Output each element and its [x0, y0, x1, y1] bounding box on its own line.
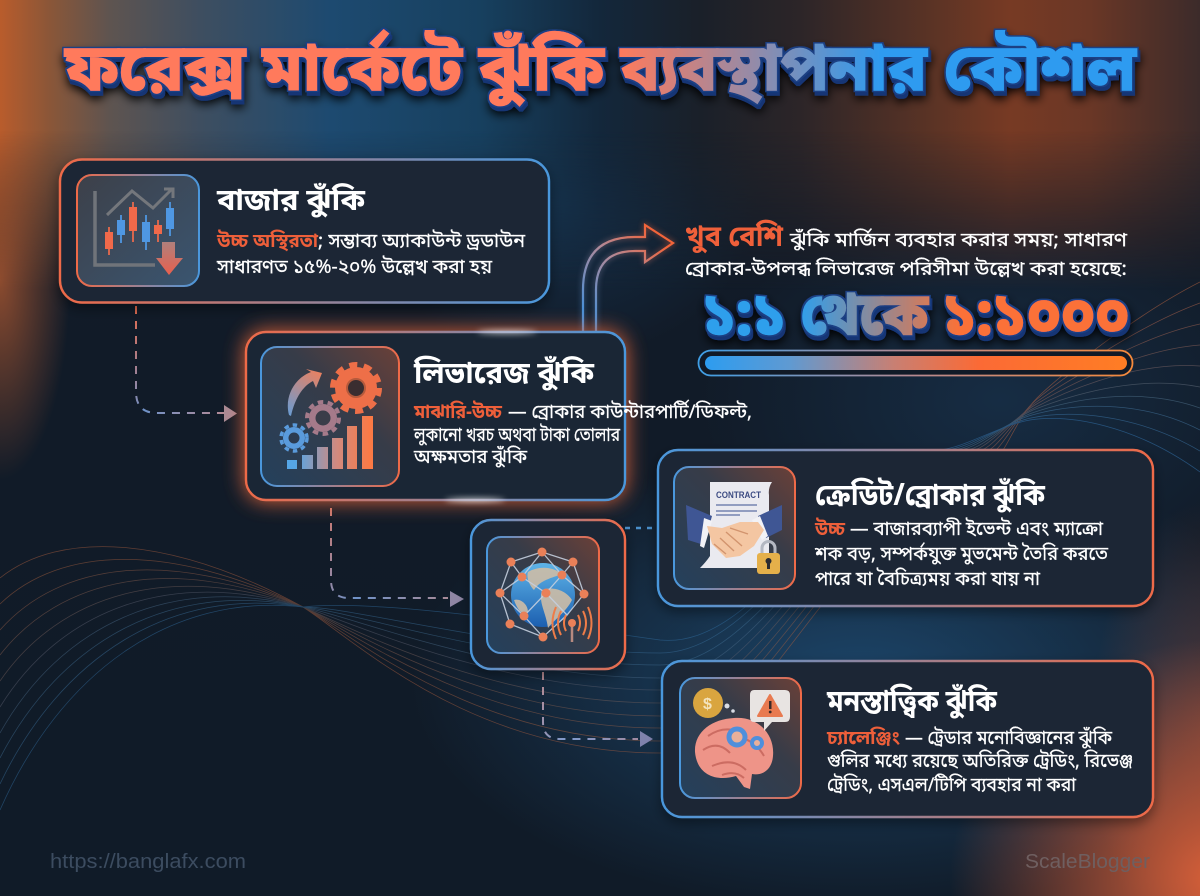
text block: গুলির মধ্যে রয়েছে অতিরিক্ত ট্রেডিং, রিভেঞ্জ	[827, 749, 1133, 775]
title: ফরেক্স মার্কেটে ঝুঁকি ব্যবস্থাপনার কৌশল	[64, 29, 1137, 117]
callout text: leverage: ব্রোকার-উপলব্ধ লিভারেজ পরিসীমা উল্লেখ করা হয়েছে:	[685, 257, 1127, 283]
heading: লিভারেজ ঝুঁকি	[413, 355, 595, 396]
icon: contract handshake and lock: CONTRACT	[716, 490, 761, 500]
panel: credit broker risk	[658, 450, 1153, 606]
panel: leverage risk	[244, 330, 752, 502]
background top colour band	[0, 0, 1200, 300]
wave lines: right bundle	[939, 282, 1200, 472]
icon: contract handshake and lock	[674, 467, 795, 589]
connector arrow: leverage risk to globe card	[331, 508, 464, 607]
heading: মনস্তাত্ত্বিক ঝুঁকি	[826, 683, 998, 724]
text block: — ব্রোকার কাউন্টারপার্টি/ডিফল্ট,	[508, 399, 752, 426]
text block: অক্ষমতার ঝুঁকি	[413, 445, 528, 471]
wave lines: lower left bundle	[0, 450, 1003, 810]
icon: globe network with antenna	[487, 537, 599, 653]
leverage range bar	[698, 350, 1132, 376]
text block: — বাজারব্যাপী ইভেন্ট এবং ম্যাক্রো	[850, 517, 1104, 543]
panel: psychological risk	[662, 661, 1153, 817]
text block: উচ্চ অস্থিরতা	[216, 230, 319, 255]
connector: globe card to credit card	[625, 527, 656, 529]
text block: — ট্রেডার মনোবিজ্ঞানের ঝুঁকি	[905, 726, 1113, 752]
footer url: https://banglafx.com	[50, 851, 246, 873]
text block	[814, 517, 1109, 593]
text block: ; সম্ভাব্য অ্যাকাউন্ট ড্রডাউন	[318, 229, 526, 255]
text block	[826, 726, 1133, 799]
icon: brain with gears, coin and warning: $	[703, 696, 712, 713]
panel: globe network	[471, 520, 625, 669]
text block	[413, 399, 752, 471]
callout arrow	[583, 225, 673, 332]
text block: চ্যালেঞ্জিং	[826, 727, 900, 752]
big number: leverage range: ১:১ থেকে ১:১০০০	[702, 281, 1129, 358]
heading: ক্রেডিট/ব্রোকার ঝুঁকি	[815, 477, 1046, 518]
text block: পারে যা বৈচিত্র্যময় করা যায় না	[815, 567, 1041, 593]
text block: উচ্চ	[814, 518, 845, 543]
icon: candlestick chart with down arrow	[77, 175, 199, 286]
icon: gears and rising bars	[261, 347, 399, 486]
panel: market risk	[60, 160, 549, 302]
text block	[216, 229, 526, 281]
heading: বাজার ঝুঁকি	[216, 182, 366, 223]
callout text: leverage: খুব বেশি	[685, 219, 783, 258]
connector arrow: globe card to psychological risk	[543, 672, 653, 747]
connector arrow: market risk to leverage risk	[136, 306, 237, 422]
icon: brain with gears, coin and warning	[680, 678, 801, 798]
footer brand: ScaleBlogger	[1025, 851, 1150, 873]
text block: সাধারণত ১৫%-২০% উল্লেখ করা হয়	[216, 255, 493, 281]
text block: মাঝারি-উচ্চ	[413, 401, 502, 426]
callout text: leverage: ঝুঁকি মার্জিন ব্যবহার করার সময়; সাধারণ	[789, 228, 1127, 254]
text block: ট্রেডিং, এসএল/টিপি ব্যবহার না করা	[827, 773, 1077, 799]
text block: লুকানো খরচ অথবা টাকা তোলার	[413, 423, 621, 449]
text block: শক বড়, সম্পর্কযুক্ত মুভমেন্ট তৈরি করতে	[814, 542, 1109, 568]
callout text: leverage	[685, 219, 1127, 283]
